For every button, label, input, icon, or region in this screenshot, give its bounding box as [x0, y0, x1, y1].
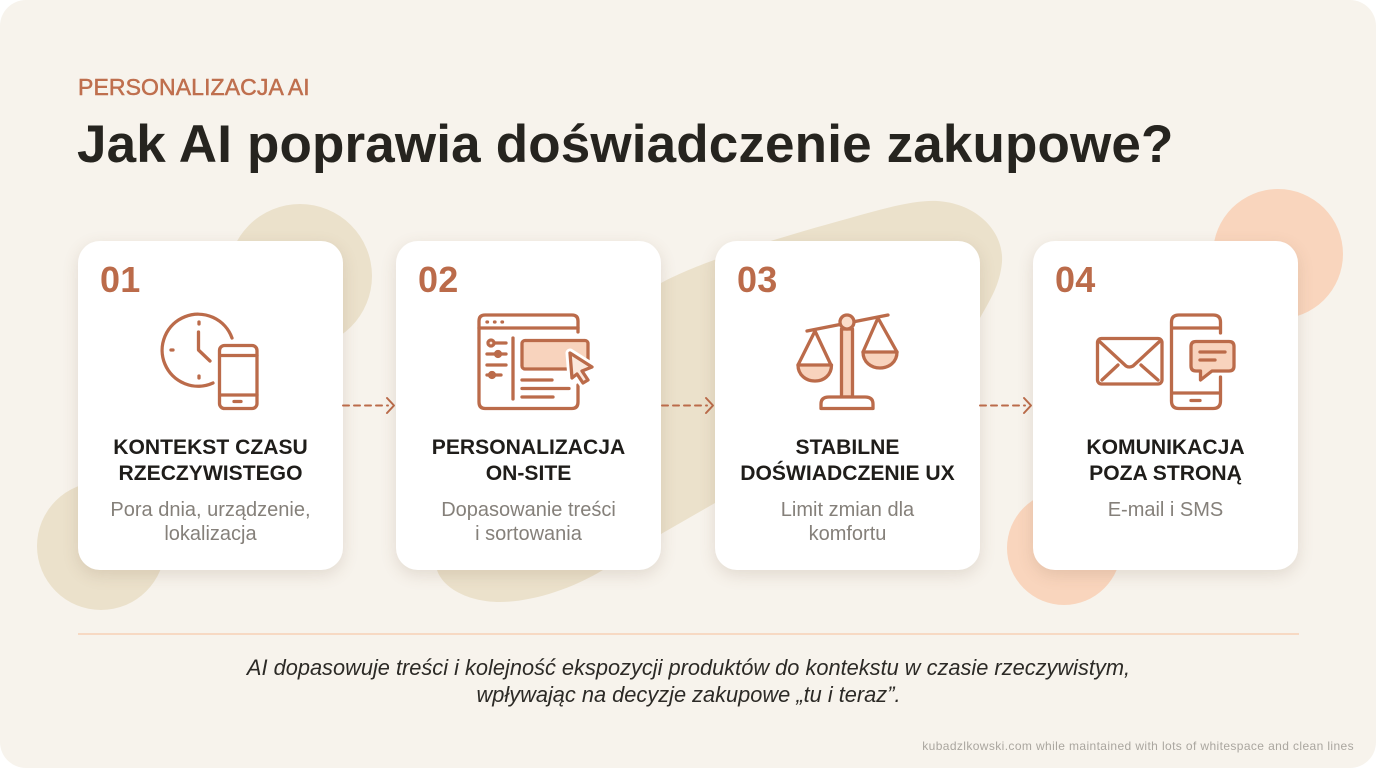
heading: STABILNE	[796, 436, 899, 459]
description: lokalizacja	[164, 523, 257, 545]
description	[110, 499, 311, 545]
arrow 3	[979, 397, 1032, 414]
number 03: 03	[737, 259, 777, 300]
heading	[432, 436, 625, 485]
description: Pora dnia, urządzenie,	[110, 499, 311, 521]
summary text: AI dopasowuje treści i kolejność ekspozycji produktów do kontekstu w czasie rzeczywistym,	[247, 655, 1130, 680]
heading: KOMUNIKACJA	[1086, 436, 1245, 459]
card 1	[78, 241, 343, 570]
number 04: 04	[1055, 259, 1095, 300]
summary text	[246, 655, 1130, 707]
description: komfortu	[809, 523, 886, 545]
heading	[740, 436, 955, 485]
description	[441, 499, 616, 545]
description	[781, 499, 914, 545]
number 02: 02	[418, 259, 458, 300]
icon: browser with cursor	[477, 313, 594, 410]
heading: POZA STRONĄ	[1089, 462, 1242, 485]
description: Dopasowanie treści	[441, 499, 616, 521]
icon: clock and phone	[160, 312, 259, 410]
summary text: wpływając na decyzje zakupowe „tu i teraz”.	[476, 682, 901, 707]
icon: balance scale	[796, 313, 899, 410]
eyebrow label: PERSONALIZACJA AI	[78, 74, 310, 100]
number 01: 01	[100, 259, 140, 300]
card 2	[396, 241, 661, 570]
heading: KONTEKST CZASU	[113, 436, 308, 459]
heading	[113, 436, 308, 485]
card 4	[1033, 241, 1298, 570]
card 3	[715, 241, 980, 570]
arrow 2	[661, 397, 714, 414]
heading	[1086, 436, 1245, 485]
description: Limit zmian dla	[781, 499, 914, 521]
heading: ON-SITE	[486, 462, 571, 485]
title: Jak AI poprawia doświadczenie zakupowe?	[77, 115, 1174, 174]
description: E-mail i SMS	[1108, 499, 1223, 521]
heading: DOŚWIADCZENIE UX	[740, 462, 955, 485]
divider	[78, 633, 1299, 635]
icon: envelope and phone with chat	[1096, 313, 1236, 410]
footer note: kubadzlkowski.com while maintained with lots of whitespace and clean lines	[922, 739, 1354, 753]
description: i sortowania	[475, 523, 582, 545]
heading: PERSONALIZACJA	[432, 436, 625, 459]
arrow 1	[342, 397, 395, 414]
heading: RZECZYWISTEGO	[118, 462, 302, 485]
